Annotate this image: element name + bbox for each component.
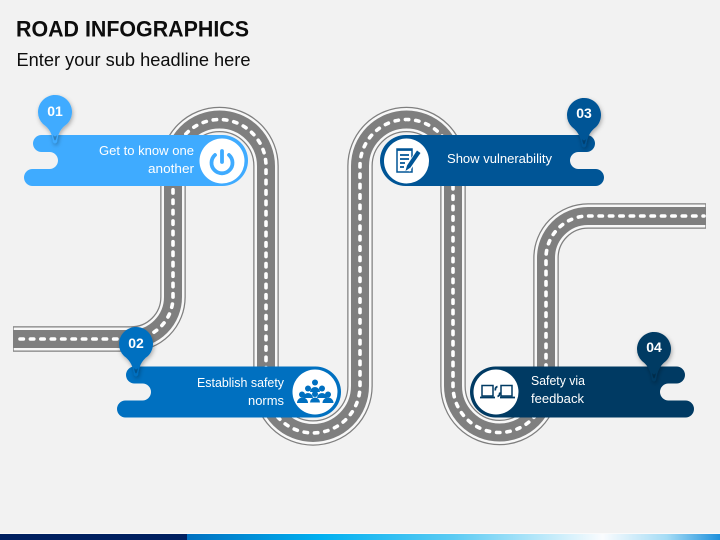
text: establish safety norms: norms — [248, 393, 284, 408]
text: safety via feedback — [531, 373, 586, 406]
banner shape 2 — [117, 366, 341, 418]
pin 04: 04 — [646, 339, 662, 355]
text: establish safety norms: Establish safety — [197, 375, 284, 390]
footer gradient bar — [0, 533, 720, 540]
banner shape 3 — [380, 135, 604, 186]
icon: notepad and pen — [384, 138, 429, 184]
winding road — [13, 120, 706, 433]
step 1 banner — [24, 135, 248, 186]
text: get to know one another: another — [148, 161, 195, 176]
pin 02 — [119, 327, 153, 376]
text: safety via feedback: Safety via — [531, 373, 586, 388]
icon: power — [200, 138, 244, 184]
pin 02: 02 — [128, 335, 144, 351]
step 2 banner — [117, 366, 341, 418]
pin 01 — [38, 95, 72, 144]
title: ROAD INFOGRAPHICS — [16, 16, 249, 42]
step 4 banner — [470, 366, 694, 418]
text: get to know one another — [99, 143, 195, 176]
icon: people pyramid — [292, 370, 338, 414]
text: safety via feedback: feedback — [531, 391, 584, 406]
pin 01: 01 — [47, 103, 63, 119]
sub headline: Enter your sub headline here — [16, 49, 250, 70]
icon: two laptops — [474, 370, 518, 414]
pin 03: 03 — [576, 105, 592, 121]
text: get to know one another: Get to know one — [99, 143, 194, 158]
text: establish safety norms — [197, 375, 284, 408]
text: show vulnerability: Show vulnerability — [447, 151, 552, 166]
banner shape 4 — [470, 366, 694, 418]
step 3 banner — [380, 135, 604, 186]
pin 04 — [637, 332, 671, 382]
pin 03 — [567, 98, 601, 148]
banner shape 1 — [24, 135, 248, 186]
